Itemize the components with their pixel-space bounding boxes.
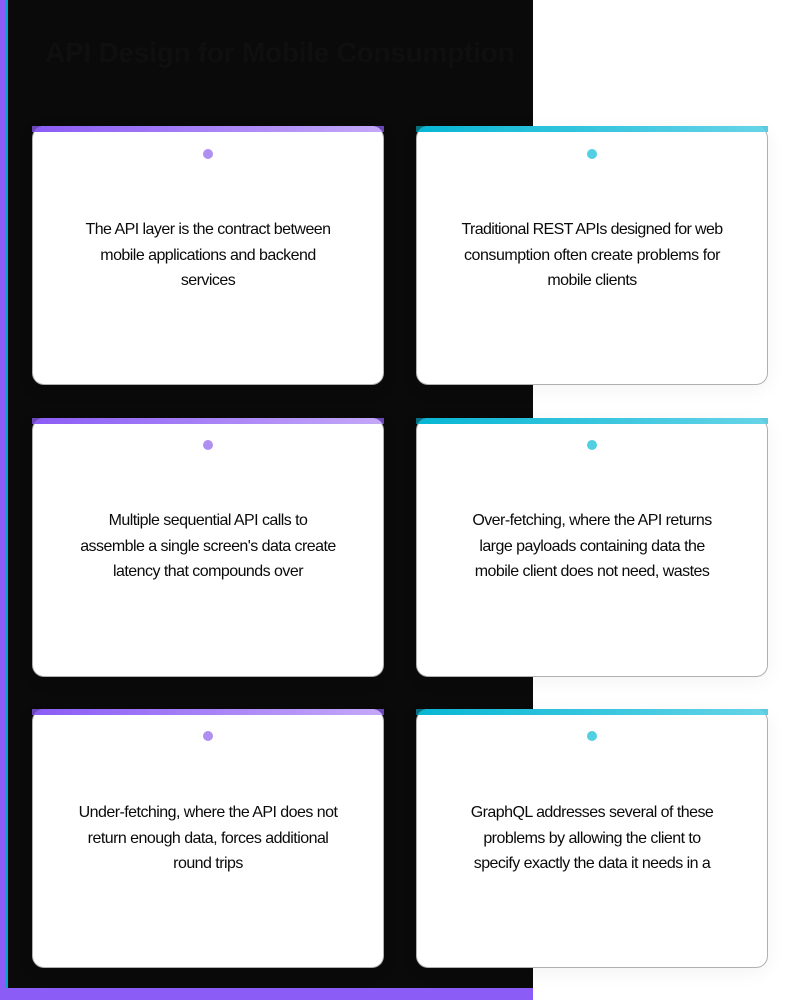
title: API Design for Mobile Consumption	[45, 37, 514, 68]
panel: REST problems	[416, 126, 768, 385]
text: REST problems: Traditional REST APIs designed for web	[461, 221, 723, 238]
text: REST problems: mobile clients	[547, 272, 637, 289]
dot	[203, 440, 213, 450]
dark background panel	[0, 0, 533, 988]
left accent stripe	[0, 0, 8, 988]
text: sequential calls: assemble a single screen's data create	[80, 538, 336, 555]
text: API layer: The API layer is the contract between	[85, 221, 331, 238]
panel: API layer	[32, 126, 384, 385]
text: GraphQL: specify exactly the data it needs in a	[474, 855, 710, 872]
panel: GraphQL	[416, 709, 768, 968]
dot	[203, 731, 213, 741]
text: GraphQL: problems by allowing the client to	[483, 830, 701, 847]
text: over-fetching	[472, 512, 712, 580]
text: REST problems	[461, 221, 723, 289]
text: REST problems: consumption often create problems for	[464, 247, 720, 264]
text: GraphQL	[471, 804, 714, 872]
dot	[587, 731, 597, 741]
panel: over-fetching	[416, 418, 768, 677]
text: sequential calls: Multiple sequential API calls to	[109, 512, 307, 529]
text: under-fetching: round trips	[173, 855, 243, 872]
text: GraphQL: GraphQL addresses several of these	[471, 804, 713, 821]
bottom purple band	[0, 988, 533, 1000]
text: sequential calls	[80, 512, 336, 580]
text: API layer	[85, 221, 331, 289]
text: over-fetching: mobile client does not need, wastes	[475, 563, 709, 580]
text: API layer: services	[181, 272, 235, 289]
panel: under-fetching	[32, 709, 384, 968]
text: API layer: mobile applications and backend	[100, 247, 316, 264]
panel: sequential calls	[32, 418, 384, 677]
text: under-fetching: return enough data, forces additional	[88, 830, 328, 847]
text: under-fetching	[79, 804, 338, 872]
text: over-fetching: large payloads containing data the	[479, 538, 705, 555]
dot	[587, 440, 597, 450]
text: under-fetching: Under-fetching, where the API does not	[79, 804, 337, 821]
text: sequential calls: latency that compounds over	[113, 563, 303, 580]
dot	[203, 149, 213, 159]
dot	[587, 149, 597, 159]
text: over-fetching: Over-fetching, where the API returns	[472, 512, 712, 529]
